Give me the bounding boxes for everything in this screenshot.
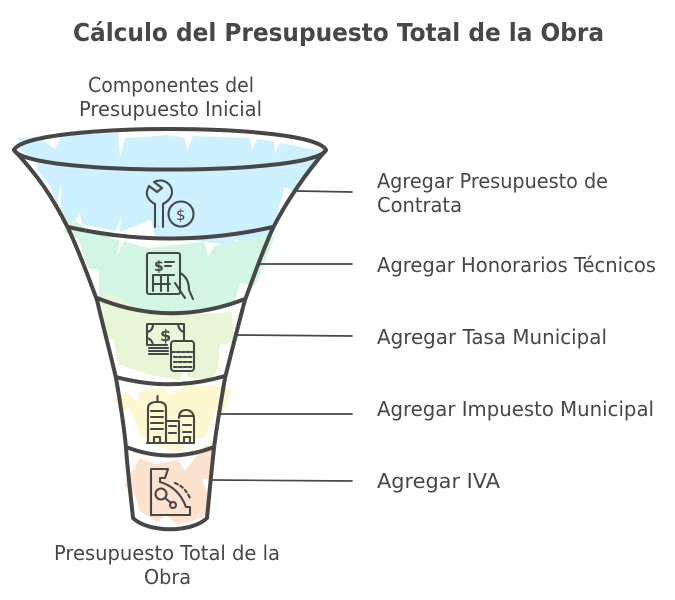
label: agregar tasa municipal: Agregar Tasa Municipal xyxy=(377,325,607,349)
top label: componentes del presupuesto inicial xyxy=(79,73,262,121)
band divider 3 xyxy=(116,376,225,384)
band fill: peach xyxy=(124,445,213,525)
label: agregar presupuesto de contrata: Agregar Presupuesto de xyxy=(377,169,608,193)
top label: componentes del presupuesto inicial: Presupuesto Inicial xyxy=(79,97,262,121)
icon: invoice with hand xyxy=(147,253,193,299)
label: agregar impuesto municipal: Agregar Impuesto Municipal xyxy=(377,397,654,421)
band divider 4 xyxy=(126,447,214,456)
band fill: lime xyxy=(100,291,234,380)
funnel rim xyxy=(14,129,326,170)
band fill: blue xyxy=(18,133,322,245)
band fill: green xyxy=(63,217,275,318)
label: agregar presupuesto de contrata xyxy=(377,169,608,217)
icon: cash register xyxy=(151,469,190,515)
label: agregar iva: Agregar IVA xyxy=(377,469,500,493)
band divider 1 xyxy=(68,227,273,238)
panel: funnel xyxy=(14,129,326,529)
title: Cálculo del Presupuesto Total de la Obra xyxy=(73,18,604,47)
band divider 2 xyxy=(97,298,245,313)
icon: banknote and calculator xyxy=(147,324,194,371)
icon: wrench and dollar coin: $ xyxy=(176,206,186,224)
icon: invoice with hand: $ xyxy=(154,259,164,275)
top label: componentes del presupuesto inicial: Componentes del xyxy=(88,73,254,97)
icon: wrench and dollar coin xyxy=(147,181,194,227)
label: agregar honorarios técnicos: Agregar Honorarios Técnicos xyxy=(377,253,656,277)
bottom label: presupuesto total de la obra: Presupuesto Total de la xyxy=(54,541,280,565)
icon: city buildings xyxy=(147,396,194,443)
bottom label: presupuesto total de la obra: Obra xyxy=(144,565,191,589)
band fill: yellow xyxy=(113,385,232,452)
label: agregar presupuesto de contrata: Contrata xyxy=(377,193,462,217)
bottom label: presupuesto total de la obra xyxy=(54,541,280,589)
icon: banknote and calculator: $ xyxy=(160,326,171,345)
funnel outline xyxy=(14,150,326,529)
connector lines xyxy=(212,191,352,481)
